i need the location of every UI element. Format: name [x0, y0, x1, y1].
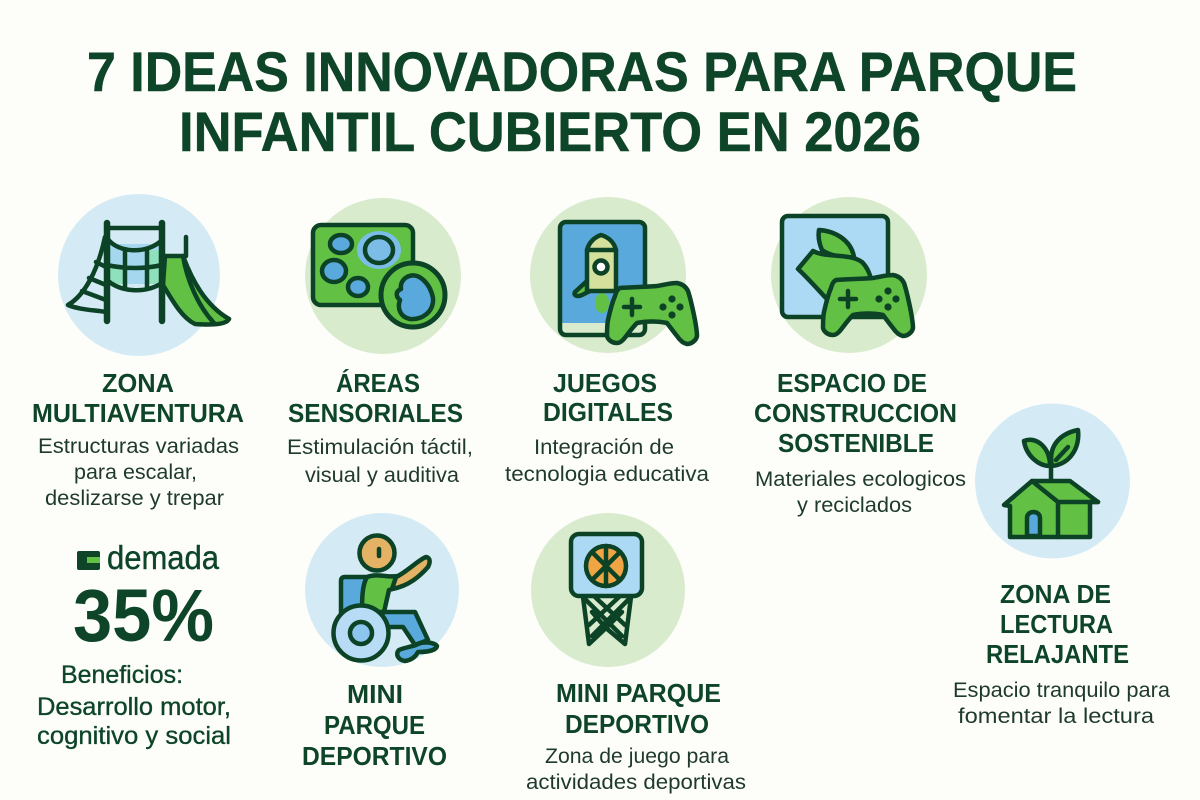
stat: 35%: 35%: [73, 574, 214, 657]
label: demada: demada: [107, 539, 220, 576]
benefits text: Beneficios:: [61, 661, 183, 689]
heading: MULTIAVENTURA: [32, 398, 244, 428]
heading: PARQUE: [324, 710, 425, 740]
heading: [986, 579, 1129, 669]
description: Materiales ecologicos: [755, 467, 966, 491]
heading: ÁREAS: [336, 368, 420, 398]
description: deslizarse y trepar: [45, 486, 224, 510]
title: [87, 40, 1077, 163]
panel: mini parque deportivo inclusive: [302, 513, 459, 771]
description: Espacio tranquilo para: [953, 678, 1170, 702]
description: visual y auditiva: [305, 463, 459, 487]
heading: DEPORTIVO: [565, 709, 709, 739]
benefits text: Desarrollo motor,: [37, 693, 231, 721]
icon: child in wheelchair: [305, 513, 459, 667]
heading: [543, 368, 673, 427]
description: Estimulación táctil,: [287, 435, 473, 459]
heading: [32, 368, 244, 428]
heading: MINI PARQUE: [556, 678, 721, 708]
heading: ESPACIO DE: [777, 368, 927, 398]
icon: green house with sprout: [975, 404, 1130, 558]
panel: areas sensoriales: [287, 198, 473, 487]
icon: tablet with rocket and gamepad: [530, 197, 697, 353]
heading: DEPORTIVO: [302, 741, 447, 771]
description: Integración de: [534, 435, 674, 459]
panel: zona multiaventura: [32, 194, 244, 510]
benefits text: [37, 661, 231, 750]
description: [505, 435, 709, 486]
title: 7 IDEAS INNOVADORAS PARA PARQUE: [87, 40, 1077, 103]
description: [755, 467, 966, 517]
heading: LECTURA: [1000, 609, 1113, 639]
panel: demand statistic and benefits: [37, 539, 231, 750]
description: actividades deportivas: [526, 770, 746, 794]
heading: ZONA: [102, 368, 174, 398]
heading: SENSORIALES: [288, 398, 463, 428]
panel: zona de lectura relajante: [953, 404, 1170, 728]
heading: DIGITALES: [543, 397, 673, 427]
title: INFANTIL CUBIERTO EN 2026: [179, 100, 921, 163]
description: [526, 744, 746, 794]
heading: RELAJANTE: [986, 639, 1129, 669]
icon: demand badge: [77, 551, 100, 570]
heading: [556, 678, 721, 739]
icon: leaf panel with gamepad: [771, 197, 927, 353]
icon: basketball hoop: [531, 513, 685, 667]
description: para escalar,: [74, 460, 197, 484]
heading: SOSTENIBLE: [778, 428, 934, 458]
icon: sensory board: [305, 198, 461, 354]
heading: [302, 679, 447, 771]
description: tecnologia educativa: [505, 462, 709, 486]
heading: CONSTRUCCION: [754, 398, 957, 428]
description: Zona de juego para: [545, 744, 729, 768]
heading: [754, 368, 957, 458]
benefits text: cognitivo y social: [37, 722, 231, 750]
description: y reciclados: [797, 493, 912, 517]
description: Estructuras variadas: [38, 434, 239, 458]
heading: MINI: [347, 679, 403, 709]
icon: climbing net and slide: [58, 194, 229, 356]
panel: juegos digitales: [505, 197, 709, 486]
heading: [288, 368, 463, 428]
description: fomentar la lectura: [958, 704, 1154, 728]
description: [953, 678, 1170, 728]
heading: ZONA DE: [1000, 579, 1111, 609]
description: [287, 435, 473, 487]
description: [38, 434, 239, 510]
heading: JUEGOS: [553, 368, 657, 398]
panel: mini parque deportivo: [526, 513, 746, 794]
panel: espacio de construccion sostenible: [754, 197, 966, 517]
